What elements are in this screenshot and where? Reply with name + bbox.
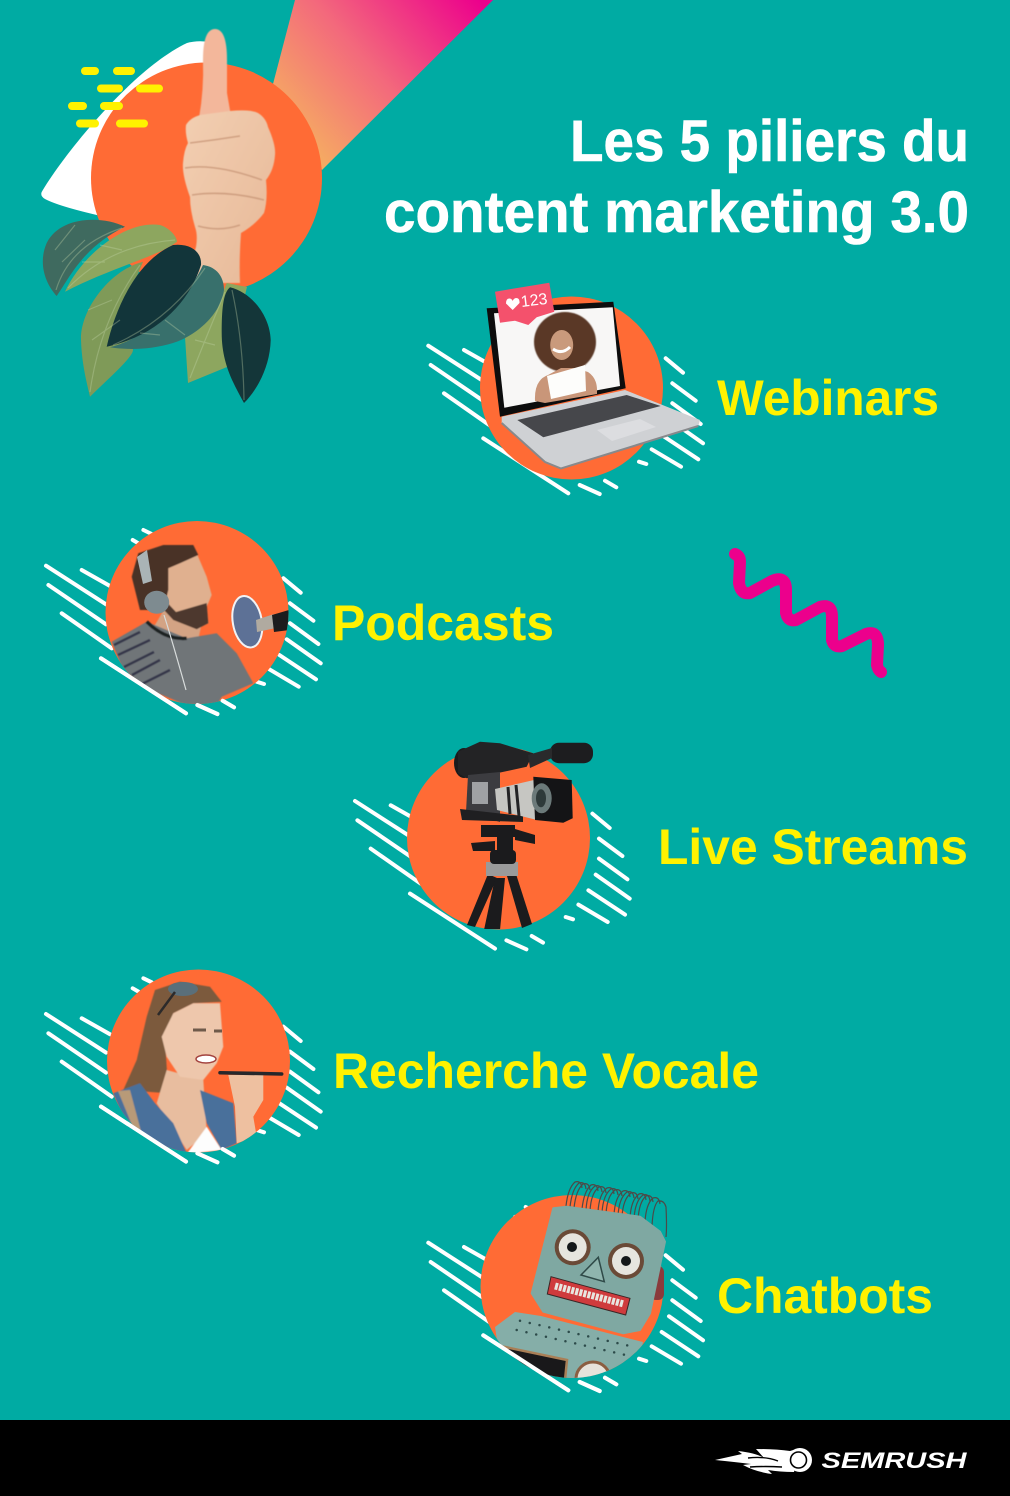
orange circle bbox=[480, 1195, 664, 1378]
title: content marketing 3.0 bbox=[384, 180, 969, 245]
robot head bbox=[532, 1207, 665, 1333]
orange circle bbox=[407, 746, 590, 930]
orange circle bbox=[480, 296, 663, 480]
footer bar bbox=[0, 1420, 1010, 1496]
orange circle bbox=[107, 970, 290, 1152]
panel: webinars bbox=[428, 283, 703, 494]
panel: recherche vocale bbox=[46, 970, 321, 1162]
icon: retro robot bbox=[495, 1182, 666, 1396]
icon: man at microphone bbox=[112, 545, 289, 705]
orange circle bbox=[91, 62, 322, 294]
title bbox=[384, 109, 969, 245]
decorative squiggle bbox=[735, 554, 881, 672]
camera body bbox=[454, 748, 466, 778]
headphones bbox=[137, 550, 152, 584]
white stripes bbox=[428, 310, 703, 494]
title: Les 5 piliers du bbox=[570, 109, 969, 174]
icon: laptop with woman bbox=[487, 283, 700, 468]
wordmark: SEMRUSH bbox=[822, 1448, 968, 1473]
semrush logo bbox=[715, 1448, 968, 1474]
label: webinars: Webinars bbox=[717, 370, 939, 426]
leaves bbox=[43, 220, 271, 403]
label: chatbots: Chatbots bbox=[717, 1268, 933, 1324]
hero illustration: thumbs up bbox=[41, 0, 493, 403]
panel: podcasts bbox=[46, 521, 321, 714]
icon: woman speaking into phone bbox=[113, 982, 282, 1154]
gradient beam bbox=[273, 0, 493, 170]
notification bubble bbox=[495, 283, 554, 325]
robot body bbox=[495, 1312, 643, 1378]
hand bbox=[183, 29, 275, 283]
lower stripes bbox=[101, 1107, 234, 1162]
icon: video camera on tripod bbox=[454, 742, 593, 930]
orange circle bbox=[106, 521, 288, 704]
panel: live streams bbox=[355, 742, 630, 949]
lower stripes bbox=[101, 658, 234, 714]
lower stripes bbox=[483, 1335, 616, 1391]
white blob bbox=[41, 41, 210, 218]
antenna springs bbox=[566, 1182, 666, 1237]
panel: chatbots bbox=[428, 1182, 703, 1396]
microphone bbox=[231, 595, 264, 648]
white stripes bbox=[46, 530, 321, 714]
label: podcasts: Podcasts bbox=[332, 595, 554, 651]
yellow speed dashes bbox=[72, 71, 159, 124]
icon: flaming ball bbox=[715, 1448, 812, 1474]
white stripes bbox=[46, 978, 321, 1162]
label: recherche vocale: Recherche Vocale bbox=[333, 1043, 759, 1099]
label: live streams: Live Streams bbox=[658, 819, 968, 875]
white stripes bbox=[355, 765, 630, 949]
tripod bbox=[467, 825, 535, 930]
notification bubble: 123 bbox=[520, 291, 549, 311]
white stripes bbox=[428, 1207, 703, 1391]
